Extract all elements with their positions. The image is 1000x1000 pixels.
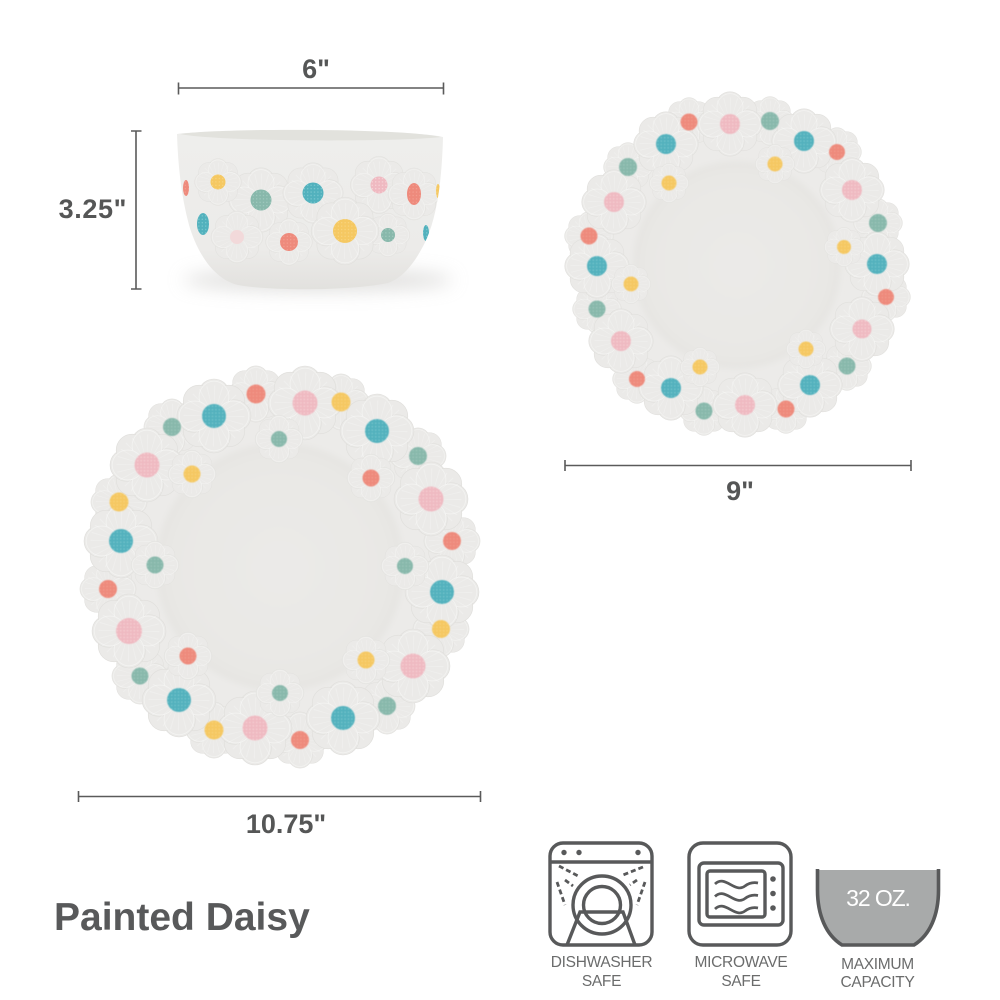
icon: microwave safe xyxy=(689,843,791,945)
dimension: large plate 10.75 inches xyxy=(78,791,480,839)
rim flowers, small xyxy=(79,365,481,769)
dimension: bowl width 6 inches: 6" xyxy=(302,54,330,84)
rim flowers, large xyxy=(83,365,480,766)
label: microwave safe: SAFE xyxy=(721,973,761,990)
plate well xyxy=(633,161,841,369)
dimension: bowl height 3.25 inches xyxy=(59,131,142,289)
dimension: large plate 10.75 inches: 10.75" xyxy=(246,809,326,839)
icon: 32 oz maximum capacity bowl xyxy=(817,869,938,945)
bowl daisies xyxy=(183,156,441,266)
inner flowers xyxy=(131,415,429,717)
bowl interior rim xyxy=(180,130,441,140)
rim flowers, large xyxy=(564,91,910,438)
label: maximum capacity: MAXIMUM xyxy=(841,956,914,973)
dimension: small plate 9 inches: 9" xyxy=(726,476,754,506)
rim flowers, small xyxy=(564,96,911,436)
bowl shadow xyxy=(183,269,453,291)
dimension: small plate 9 inches xyxy=(565,460,911,506)
large plate, 10.75 inch xyxy=(79,365,481,769)
small plate, 9 inch xyxy=(564,91,911,438)
flower centres xyxy=(580,112,894,420)
label: dishwasher safe: DISHWASHER xyxy=(551,954,652,971)
dimension: bowl height 3.25 inches: 3.25" xyxy=(59,194,127,224)
inner flowers xyxy=(611,144,864,387)
dimension: bowl width 6 inches xyxy=(178,54,444,94)
rim base xyxy=(581,109,893,421)
bowl xyxy=(177,130,453,291)
flower centres xyxy=(99,384,461,749)
title: Painted Daisy: Painted Daisy xyxy=(54,896,310,939)
bowl body xyxy=(177,131,443,289)
plate well xyxy=(156,443,404,691)
label: maximum capacity: CAPACITY xyxy=(841,974,914,991)
icon: 32 oz maximum capacity bowl: 32 OZ. xyxy=(846,885,910,911)
label: dishwasher safe: SAFE xyxy=(582,973,621,990)
rim base xyxy=(98,385,462,749)
label: microwave safe: MICROWAVE xyxy=(695,954,787,971)
icon: dishwasher safe xyxy=(550,843,652,945)
